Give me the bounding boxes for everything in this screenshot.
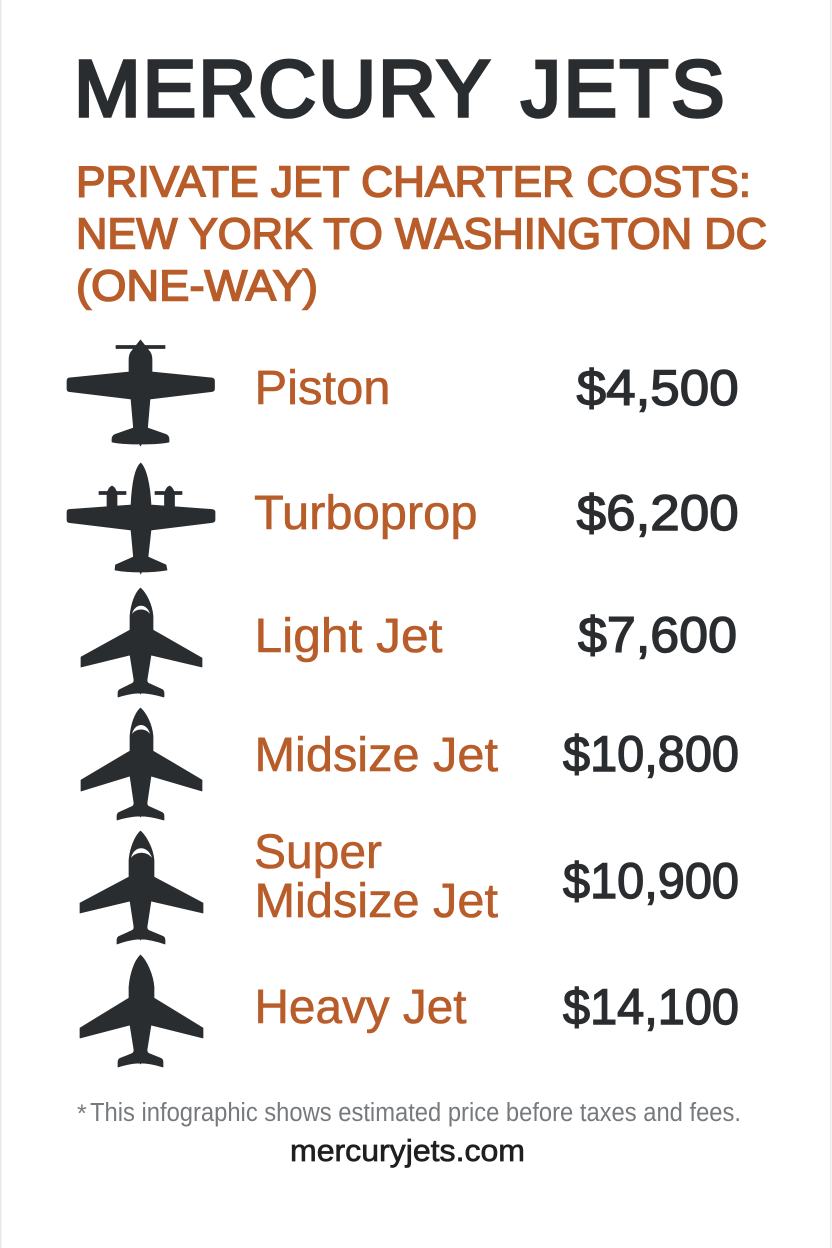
label: Super Midsize Jet: Midsize Jet <box>254 875 498 928</box>
footnote: * <box>77 1100 87 1128</box>
icon: piston plane <box>67 340 214 446</box>
website: mercuryjets.com <box>290 1133 525 1168</box>
row: heavy jet <box>80 955 739 1067</box>
row: piston <box>67 340 739 446</box>
price: Turboprop: $6,200 <box>577 485 739 541</box>
title: JETS <box>521 44 724 133</box>
row: midsize jet <box>81 708 739 820</box>
title: MERCURY <box>74 44 490 133</box>
heading: charter costs: PRIVATE JET CHARTER COSTS: <box>76 158 751 206</box>
icon: super midsize jet <box>80 831 203 944</box>
heading: charter costs <box>76 158 767 310</box>
price: Midsize Jet: $10,800 <box>563 726 739 782</box>
label: Light Jet: Light Jet <box>254 610 442 663</box>
row: light jet <box>81 588 737 697</box>
heading: charter costs: NEW YORK TO WASHINGTON DC <box>76 210 767 258</box>
label: Turboprop: Turboprop <box>254 487 478 540</box>
row: turboprop <box>67 463 739 574</box>
heading: charter costs: (ONE-WAY) <box>76 262 318 310</box>
icon: turboprop plane <box>67 463 215 574</box>
label: Super Midsize Jet: Super <box>254 826 382 879</box>
price: Heavy Jet: $14,100 <box>563 979 739 1035</box>
label: Super Midsize Jet <box>254 826 498 928</box>
label: Heavy Jet: Heavy Jet <box>254 981 466 1034</box>
icon: midsize jet <box>81 708 202 820</box>
label: Piston: Piston <box>254 362 390 415</box>
price: Super Midsize Jet: $10,900 <box>563 853 739 909</box>
icon: heavy jet <box>80 955 203 1067</box>
row: super midsize jet <box>80 826 739 944</box>
price: Light Jet: $7,600 <box>578 607 737 663</box>
label: Midsize Jet: Midsize Jet <box>254 729 498 782</box>
price: Piston: $4,500 <box>577 360 739 416</box>
title <box>74 44 724 133</box>
icon: light jet <box>81 588 202 697</box>
footnote: This infographic shows estimated price before taxes and fees. <box>90 1099 741 1127</box>
